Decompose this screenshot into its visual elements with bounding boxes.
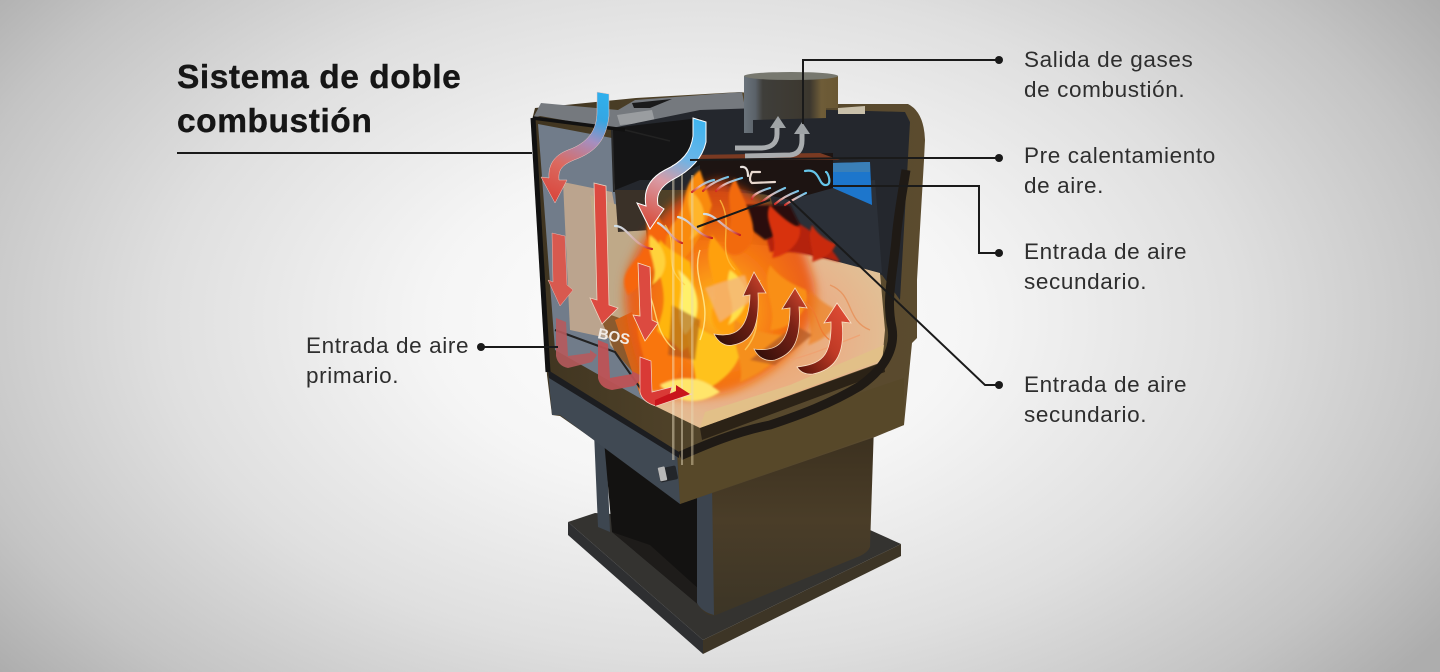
label: secondary air upper bbox=[1024, 239, 1187, 294]
leader line: primary air bbox=[477, 343, 558, 351]
upper dark chamber bbox=[612, 108, 910, 300]
leader line: heading bbox=[177, 152, 532, 154]
glass frame bbox=[533, 118, 670, 402]
label: combustion gases: de combustión. bbox=[1024, 76, 1185, 102]
arrows: downward red bbox=[548, 183, 658, 341]
leader line: secondary air lower bbox=[697, 200, 1003, 389]
label: secondary air upper: Entrada de aire bbox=[1024, 239, 1187, 264]
label: secondary air upper: secundario. bbox=[1024, 268, 1147, 294]
label: secondary air lower bbox=[1024, 372, 1187, 426]
knob bbox=[658, 465, 678, 483]
leader line: combustion gases bbox=[803, 56, 1003, 124]
label: air preheating bbox=[1024, 143, 1216, 198]
brand text on brick: BOS bbox=[596, 325, 632, 349]
arrows: rising in fire bbox=[714, 272, 851, 374]
label: combustion gases bbox=[1024, 47, 1193, 102]
flames bbox=[624, 170, 870, 401]
label: air preheating: Pre calentamiento bbox=[1024, 143, 1216, 168]
top plate bbox=[533, 92, 750, 134]
fine flame streaks bbox=[640, 200, 870, 360]
label: primary air: Entrada de aire bbox=[306, 333, 469, 358]
label: combustion gases: Salida de gases bbox=[1024, 47, 1193, 72]
secondary air wiggles bbox=[615, 167, 829, 249]
arrows: L-shaped primary air bbox=[556, 318, 692, 406]
left glass face bbox=[538, 124, 660, 405]
flame base glow bbox=[625, 180, 815, 397]
title: combustión bbox=[177, 103, 372, 140]
stove body: rear brown shell bbox=[532, 92, 925, 504]
arrow: preheated air left bbox=[541, 92, 609, 203]
right chamber wall with blue panel bbox=[690, 153, 882, 273]
label: secondary air lower: Entrada de aire bbox=[1024, 372, 1187, 397]
title bbox=[177, 59, 461, 140]
label: air preheating: de aire. bbox=[1024, 172, 1104, 198]
label: primary air bbox=[306, 333, 469, 388]
firebed bbox=[640, 240, 885, 440]
arrows: exhaust gases bbox=[735, 116, 810, 156]
stand: front box bbox=[697, 425, 874, 616]
chimney bbox=[744, 72, 865, 133]
insulation dark wavy edge bbox=[680, 170, 906, 456]
leader line: air preheating bbox=[690, 154, 1003, 162]
title: Sistema de doble bbox=[177, 59, 461, 96]
label: secondary air lower: secundario. bbox=[1024, 402, 1147, 426]
label: primary air: primario. bbox=[306, 362, 399, 388]
leader line: secondary air upper bbox=[833, 186, 1003, 257]
lower front band (metal) bbox=[548, 370, 680, 504]
stand: base plate bbox=[568, 513, 901, 654]
arrow: preheated air centre bbox=[637, 118, 706, 229]
glass glare streaks bbox=[672, 165, 694, 465]
stand: left post and open cavity bbox=[594, 432, 700, 606]
